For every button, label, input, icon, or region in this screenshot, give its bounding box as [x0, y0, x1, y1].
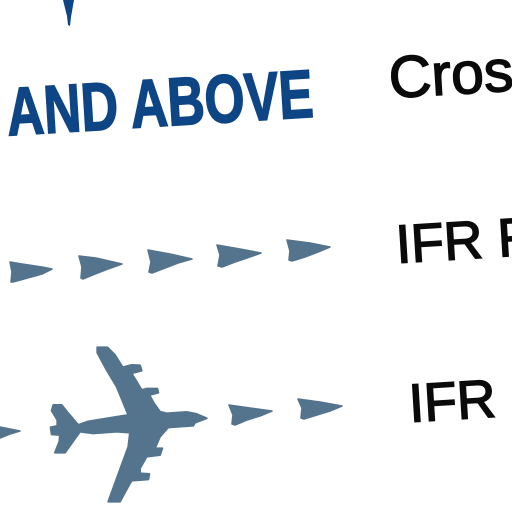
label: IFR lower: IFR [407, 369, 498, 434]
icon: small jet 2 [79, 256, 122, 279]
icon: small jet 5 [287, 240, 330, 261]
icon: blue wedge tip [63, 0, 74, 26]
row: large aircraft with jets [0, 347, 342, 502]
heading: AND ABOVE: AND ABOVE [4, 56, 315, 150]
icon: small jet far right [298, 399, 342, 419]
icon: partial small jet [0, 427, 20, 438]
icon: small jet 1 [10, 262, 52, 282]
icon: small jet 4 [217, 245, 261, 267]
icon: small jet after aircraft [229, 405, 272, 425]
icon: small jet 3 [148, 250, 192, 273]
icon: large aircraft [51, 347, 207, 502]
row: five small jets [10, 240, 330, 282]
